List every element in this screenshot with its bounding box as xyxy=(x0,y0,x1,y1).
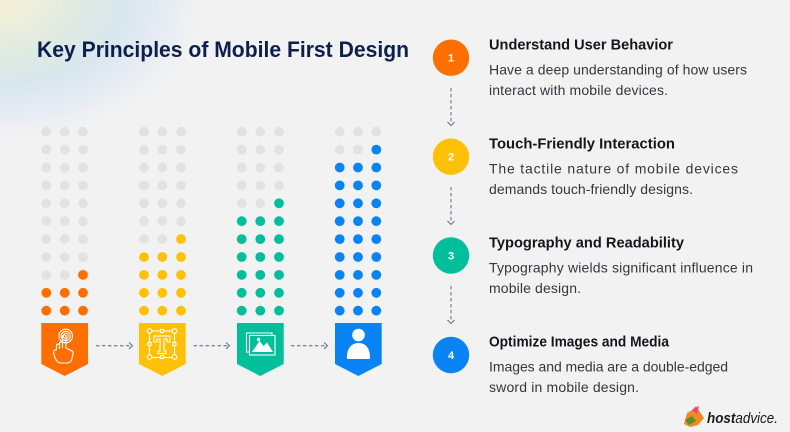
dot column: green xyxy=(237,127,284,316)
arrow: step 2 to 3 xyxy=(448,187,454,224)
step 4 text: Optimize Images and Media xyxy=(489,334,670,350)
arrow: yellow to green xyxy=(194,342,230,349)
arrow: step 1 to 2 xyxy=(448,88,454,126)
step 2 marker xyxy=(433,138,469,175)
step 4 marker xyxy=(433,337,469,373)
icon: touch badge xyxy=(41,323,88,376)
step 1 text: interact with mobile devices. xyxy=(489,82,668,98)
step 2 text: Touch-Friendly Interaction xyxy=(489,136,675,152)
step 4 text: sword in mobile design. xyxy=(489,379,639,395)
logo: hostadvice xyxy=(684,406,778,427)
arrow: green to blue xyxy=(291,342,328,349)
step 3 marker xyxy=(433,237,469,274)
step 2 marker: 2 xyxy=(448,152,454,164)
step 3 text: mobile design. xyxy=(489,280,581,296)
step 4 text xyxy=(489,334,728,395)
step 1 text: Understand User Behavior xyxy=(489,36,673,54)
icon: images badge xyxy=(237,323,284,376)
step 3 text xyxy=(489,234,753,296)
step 4 marker: 4 xyxy=(448,350,455,362)
step 4 text: Images and media are a double-edged xyxy=(489,358,728,374)
step 1 marker xyxy=(433,40,469,76)
step 3 text: Typography wields significant influence in xyxy=(489,260,753,276)
logo: hostadvice: hostadvice. xyxy=(707,411,778,427)
dot column: blue xyxy=(335,127,381,316)
icon: user badge xyxy=(335,323,382,376)
step 3 marker: 3 xyxy=(448,250,454,262)
step 1 text xyxy=(489,36,747,98)
icon: typography badge xyxy=(139,323,186,376)
dot column: orange xyxy=(41,127,88,316)
arrow: orange to yellow xyxy=(96,342,132,349)
step 1 text: Have a deep understanding of how users xyxy=(489,62,747,78)
step 2 text: demands touch-friendly designs. xyxy=(489,181,693,197)
dot column: yellow xyxy=(139,127,186,316)
arrow: step 3 to 4 xyxy=(448,286,454,324)
step 3 text: Typography and Readability xyxy=(489,234,685,252)
step 2 text xyxy=(489,136,738,197)
title: Key Principles of Mobile First Design xyxy=(37,37,409,62)
step 2 text: The tactile nature of mobile devices xyxy=(489,160,738,176)
step 1 marker: 1 xyxy=(448,52,454,64)
